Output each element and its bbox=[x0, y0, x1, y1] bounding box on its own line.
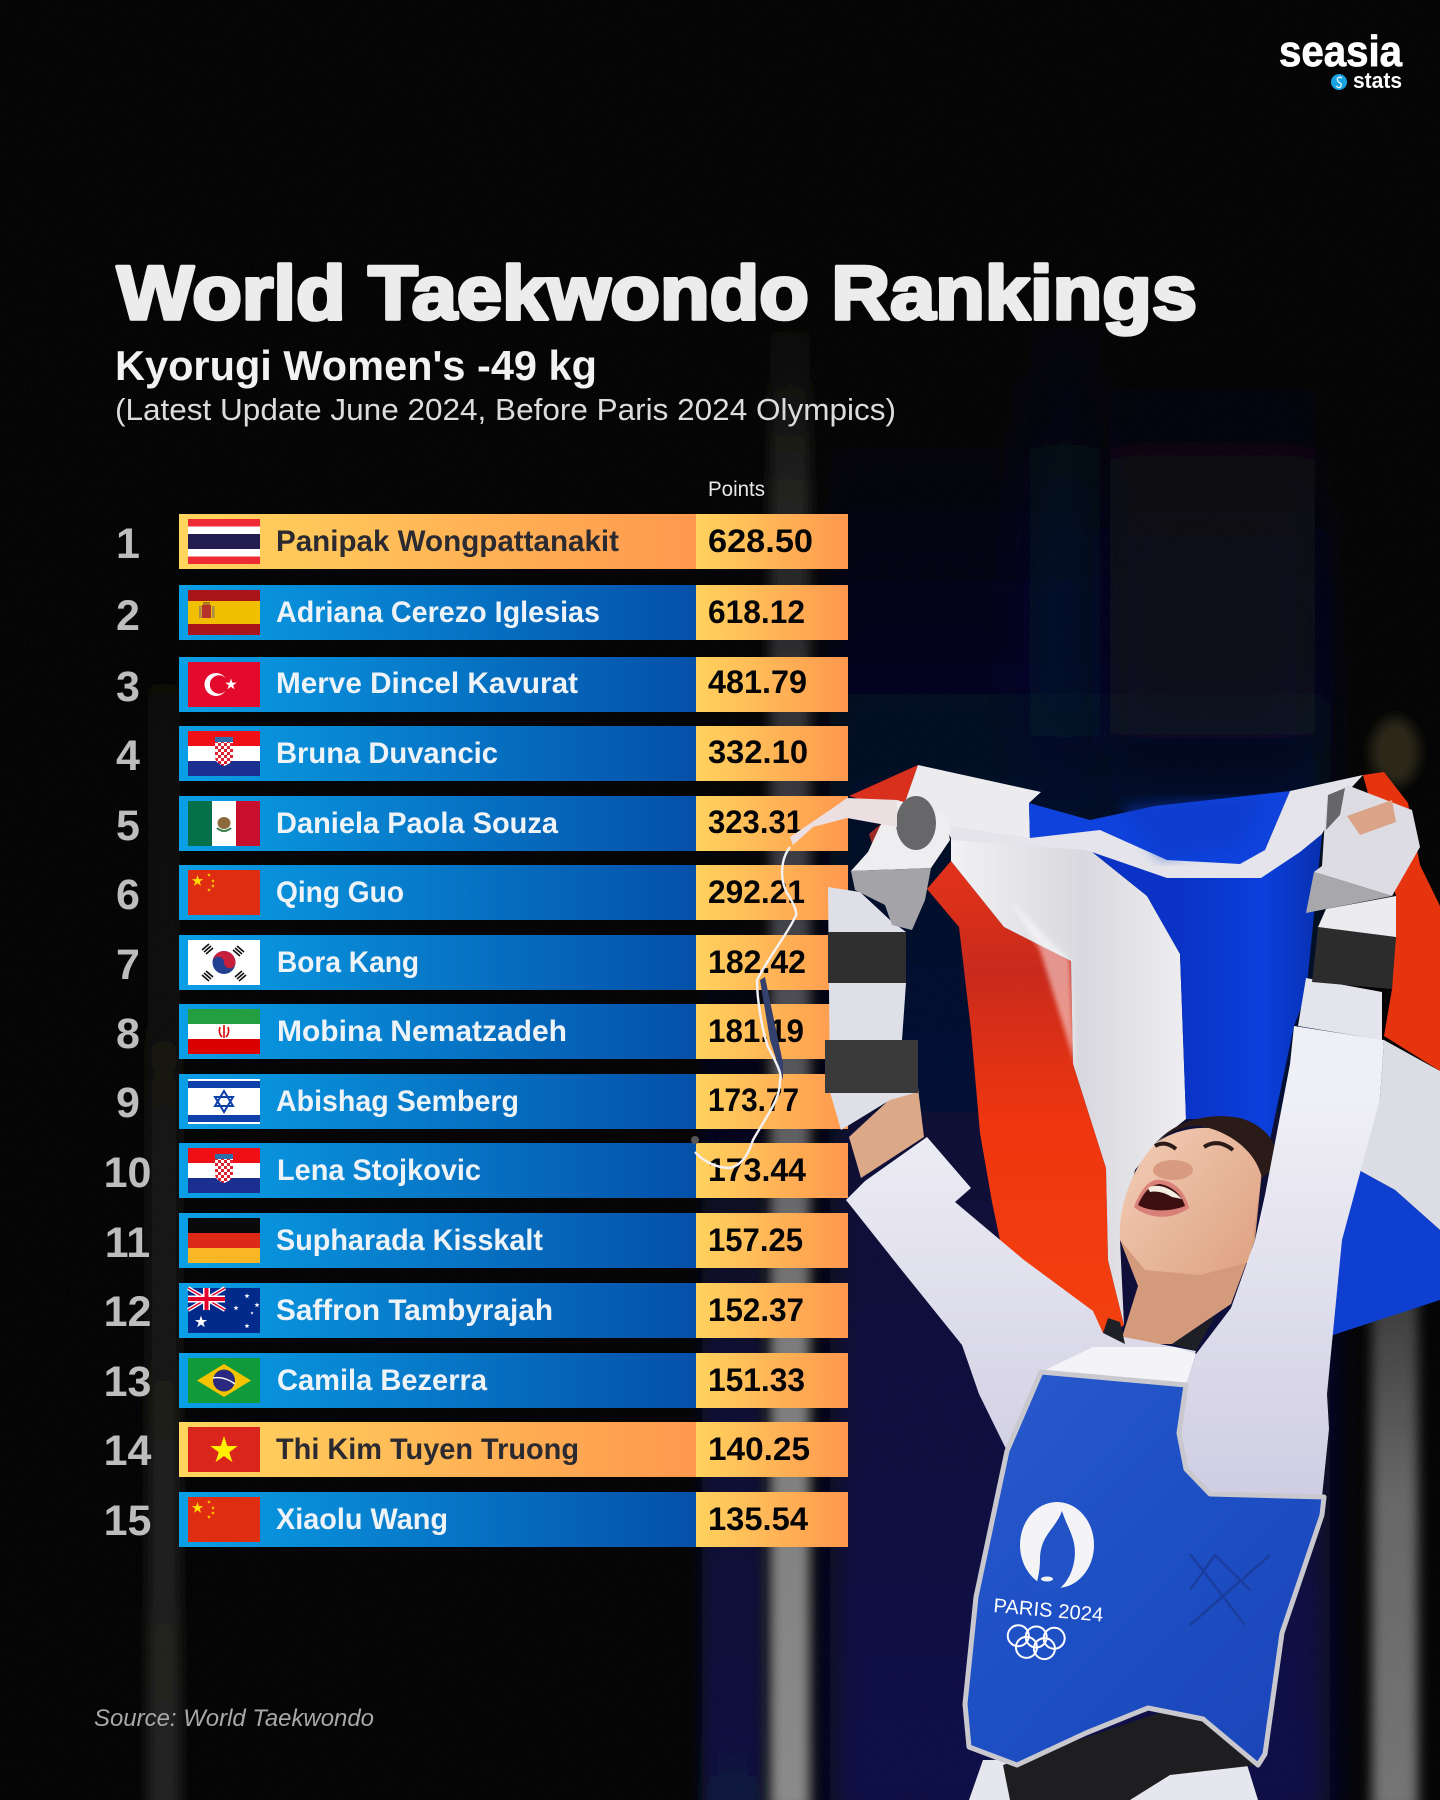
row 2: Adriana Cerezo Iglesias bbox=[276, 596, 600, 629]
logo: seasia stats bbox=[1279, 27, 1402, 93]
row 14: 140.25 bbox=[708, 1431, 810, 1467]
row 9: 9 bbox=[116, 1079, 140, 1127]
Paris 2024 label: PARIS 2024 bbox=[993, 1595, 1104, 1627]
row 4 bbox=[116, 726, 848, 781]
flag: Thailand bbox=[188, 519, 260, 564]
row 14: Thi Kim Tuyen Truong bbox=[276, 1433, 579, 1466]
row 8 bbox=[116, 1004, 848, 1059]
flag: Australia bbox=[188, 1288, 260, 1333]
head bbox=[1120, 1116, 1277, 1344]
row 15: 15 bbox=[104, 1497, 151, 1545]
row 12: Saffron Tambyrajah bbox=[276, 1294, 553, 1327]
row 8: 181.19 bbox=[708, 1013, 804, 1049]
row 5: 323.31 bbox=[708, 804, 803, 840]
row 3: Merve Dincel Kavurat bbox=[276, 667, 578, 700]
flag: Spain bbox=[188, 590, 260, 635]
flag: Turkey bbox=[188, 662, 260, 707]
row 6: Qing Guo bbox=[276, 876, 404, 909]
row 6: 292.21 bbox=[708, 874, 805, 910]
right forearm guard and glove bbox=[1298, 785, 1420, 1040]
row 14 bbox=[104, 1422, 848, 1477]
row 5: Daniela Paola Souza bbox=[276, 807, 558, 840]
row 15 bbox=[104, 1492, 848, 1547]
logo: seasia stats: seasia bbox=[1279, 27, 1402, 76]
source note: Source: World Taekwondo bbox=[94, 1705, 374, 1732]
row 5: 5 bbox=[116, 802, 140, 850]
row 8: Mobina Nematzadeh bbox=[277, 1015, 567, 1048]
blue chest protector bbox=[965, 1372, 1324, 1765]
row 14: 14 bbox=[104, 1427, 151, 1475]
row 3: 481.79 bbox=[708, 664, 807, 700]
row 3: 3 bbox=[116, 663, 140, 711]
row 1: 1 bbox=[116, 520, 140, 568]
row 8: 8 bbox=[116, 1010, 140, 1058]
update note: (Latest Update June 2024, Before Paris 2024 Olympics) bbox=[115, 392, 896, 427]
row 2: 618.12 bbox=[708, 594, 805, 630]
subtitle: Kyorugi Women's -49 kg bbox=[115, 342, 597, 389]
row 10: 173.44 bbox=[708, 1152, 806, 1188]
row 11 bbox=[105, 1213, 848, 1268]
row 10: 10 bbox=[104, 1149, 151, 1197]
row 13 bbox=[104, 1353, 848, 1408]
row 1: Panipak Wongpattanakit bbox=[276, 525, 619, 558]
points column header: Points bbox=[708, 478, 765, 501]
row 11: 157.25 bbox=[708, 1222, 803, 1258]
Olympic rings bbox=[1006, 1625, 1065, 1660]
row 15: Xiaolu Wang bbox=[276, 1503, 448, 1536]
row 11: Supharada Kisskalt bbox=[276, 1224, 543, 1257]
row 1 bbox=[116, 514, 848, 569]
flag: Iran bbox=[188, 1009, 260, 1054]
row 9: 173.77 bbox=[708, 1082, 799, 1118]
flag: Germany bbox=[188, 1218, 260, 1263]
row 15: 135.54 bbox=[708, 1501, 808, 1537]
flag: Brazil bbox=[188, 1358, 260, 1403]
row 7: Bora Kang bbox=[277, 946, 419, 979]
row 10: Lena Stojkovic bbox=[277, 1154, 481, 1187]
row 9 bbox=[116, 1074, 848, 1129]
row 2 bbox=[116, 585, 848, 640]
flag: Mexico bbox=[188, 801, 260, 846]
left arm with forearm guard bbox=[825, 887, 924, 1178]
row 4: 4 bbox=[116, 732, 140, 780]
Paris 2024 emblem bbox=[1020, 1502, 1094, 1590]
row 13: 151.33 bbox=[708, 1362, 805, 1398]
flag: China bbox=[188, 1497, 260, 1542]
logo: seasia stats: stats bbox=[1353, 68, 1402, 93]
row 7: 7 bbox=[116, 941, 140, 989]
flag ribbon end bbox=[790, 798, 897, 845]
left glove bbox=[851, 796, 950, 930]
faint vest pattern bbox=[1190, 1554, 1270, 1625]
row 2: 2 bbox=[116, 592, 140, 640]
trousers and belt bbox=[969, 1712, 1258, 1800]
title: World Taekwondo Rankings bbox=[117, 251, 1197, 336]
flag: Vietnam bbox=[188, 1427, 260, 1472]
row 6 bbox=[116, 865, 848, 920]
flag: South Korea bbox=[188, 940, 260, 985]
row 12 bbox=[104, 1283, 848, 1338]
row 7 bbox=[116, 935, 848, 990]
row 13: 13 bbox=[104, 1358, 151, 1406]
row 13: Camila Bezerra bbox=[277, 1364, 487, 1397]
row 4: 332.10 bbox=[708, 734, 808, 770]
row 10 bbox=[104, 1143, 848, 1198]
loose thread bbox=[691, 847, 796, 1168]
row 6: 6 bbox=[116, 871, 140, 919]
flag: Croatia bbox=[188, 1148, 260, 1193]
row 12: 152.37 bbox=[708, 1292, 804, 1328]
left sleeve and torso bbox=[846, 1137, 1215, 1451]
row 4: Bruna Duvancic bbox=[276, 737, 498, 770]
row 5 bbox=[116, 796, 848, 851]
flag: China bbox=[188, 870, 260, 915]
row 9: Abishag Semberg bbox=[276, 1085, 519, 1118]
flag: Israel bbox=[188, 1079, 260, 1124]
row 7: 182.42 bbox=[708, 944, 806, 980]
flag: Croatia bbox=[188, 731, 260, 776]
Thai flag bbox=[849, 765, 1440, 1340]
row 1: 628.50 bbox=[708, 523, 813, 559]
row 12: 12 bbox=[104, 1288, 151, 1336]
athlete holding Thai flag bbox=[691, 765, 1440, 1800]
row 3 bbox=[116, 657, 848, 712]
row 11: 11 bbox=[105, 1219, 150, 1267]
right arm sleeve bbox=[1179, 1026, 1384, 1497]
